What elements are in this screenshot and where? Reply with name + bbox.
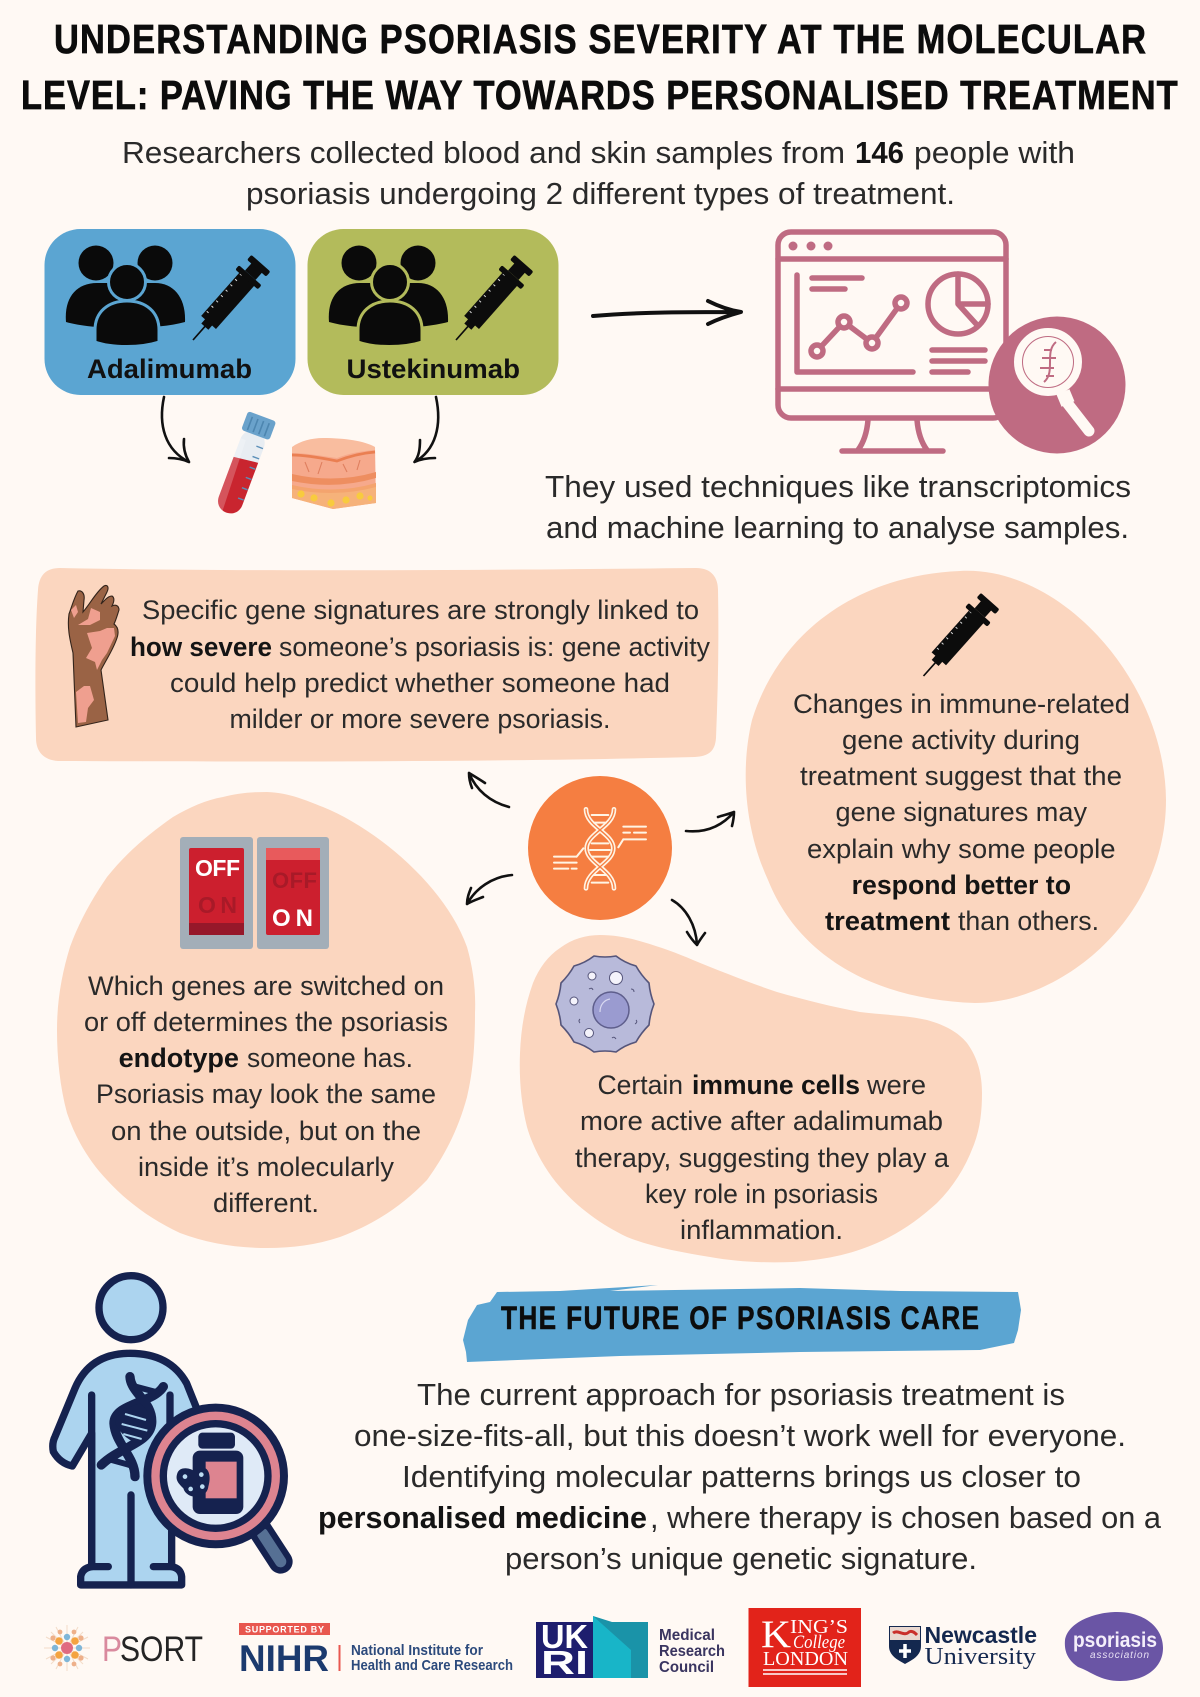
- logo: UKRI Medical Research Council: Research: [659, 1643, 725, 1660]
- severity text: [130, 595, 710, 734]
- arrow: to severity panel: [469, 773, 509, 807]
- future care text: person’s unique genetic signature.: [505, 1541, 977, 1576]
- severity text: milder or more severe psoriasis.: [230, 704, 610, 734]
- logo: Newcastle University: [889, 1622, 1037, 1670]
- logo: King's College London: College: [793, 1632, 845, 1653]
- logo: UKRI Medical Research Council: Medical: [659, 1627, 715, 1644]
- icon: skin layers: [292, 438, 376, 509]
- methods text: and machine learning to analyse samples.: [546, 510, 1129, 545]
- intro text: psoriasis undergoing 2 different types of treatment.: [246, 176, 955, 211]
- intro text: 146: [855, 135, 904, 170]
- title: [21, 17, 1178, 119]
- arrow: Adalimumab to samples: [162, 397, 189, 462]
- icon: people: [329, 246, 448, 346]
- arrow: samples to analysis: [593, 301, 741, 324]
- immune cells text: therapy, suggesting they play a: [575, 1143, 950, 1173]
- arrow: to endotype panel: [467, 875, 512, 904]
- panel: severity gene signatures: [35, 568, 718, 762]
- intro text: Researchers collected blood and skin samples from: [122, 135, 845, 170]
- arrow: to immune cells panel: [672, 900, 705, 945]
- label: Ustekinumab: Ustekinumab: [346, 354, 520, 384]
- arrow: Ustekinumab to samples: [414, 397, 438, 462]
- immune cells text: Certain: [598, 1070, 683, 1100]
- icon: immune cell: [556, 956, 654, 1052]
- future care text: one-size-fits-all, but this doesn’t work well for everyone.: [354, 1418, 1126, 1453]
- panel: Adalimumab group: [44, 229, 296, 395]
- immune cells text: were: [866, 1070, 926, 1100]
- label: Adalimumab: Adalimumab: [87, 354, 252, 384]
- icon: syringe: [182, 253, 272, 350]
- severity text: could help predict whether someone had: [170, 668, 670, 698]
- endotype text: Which genes are switched on: [88, 971, 444, 1001]
- heading: future of psoriasis care: THE FUTURE OF PSORIASIS CARE: [501, 1302, 979, 1337]
- logo: NIHR: [239, 1623, 513, 1679]
- treatment response text: explain why some people: [807, 834, 1116, 864]
- logo: UKRI Medical Research Council: UK: [541, 1618, 588, 1655]
- treatment response text: respond better to: [852, 870, 1071, 900]
- logo: Newcastle University: Newcastle: [924, 1622, 1037, 1648]
- panel: treatment response: [746, 571, 1166, 1003]
- immune cells text: immune cells: [692, 1070, 860, 1100]
- icon: on off switches: ON: [272, 905, 313, 932]
- logo: PSORT: [44, 1625, 203, 1671]
- logo: UKRI Medical Research Council: Council: [659, 1659, 714, 1676]
- icon: person with DNA and magnifier: [53, 1276, 284, 1585]
- endotype text: Psoriasis may look the same: [96, 1079, 436, 1109]
- treatment response text: treatment: [825, 906, 950, 936]
- icon: monitor with magnifier: [778, 232, 1126, 454]
- logo: UKRI Medical Research Council: [536, 1616, 725, 1681]
- immune cells text: key role in psoriasis: [645, 1179, 878, 1209]
- severity text: someone’s psoriasis is: gene activity: [279, 632, 710, 662]
- endotype text: different.: [213, 1188, 319, 1218]
- future care text: personalised medicine: [318, 1500, 647, 1535]
- immune cells text: [575, 1070, 950, 1245]
- future care text: , where therapy is chosen based on a: [650, 1500, 1162, 1535]
- endotype text: inside it’s molecularly: [138, 1152, 394, 1182]
- logo: King's College London: K: [761, 1613, 791, 1656]
- logo: PSORT: P: [102, 1630, 122, 1669]
- icon: on off switches: OFF: [272, 868, 317, 893]
- logo: PSORT: SORT: [120, 1630, 203, 1669]
- title: UNDERSTANDING PSORIASIS SEVERITY AT THE MOLECULAR: [54, 17, 1146, 63]
- immune cells text: more active after adalimumab: [580, 1106, 943, 1136]
- icon: people: [66, 246, 185, 346]
- treatment response text: treatment suggest that the: [800, 761, 1122, 791]
- logo: Psoriasis Association: [1065, 1612, 1163, 1681]
- immune cells text: inflammation.: [680, 1215, 843, 1245]
- icon: arm with psoriasis patches: [68, 585, 119, 727]
- icon: central DNA circle: [528, 776, 672, 920]
- icon: on off switches: [180, 837, 329, 949]
- severity text: how severe: [130, 632, 272, 662]
- logo: King's College London: [748, 1608, 861, 1687]
- endotype text: endotype: [119, 1043, 239, 1073]
- treatment response text: gene activity during: [842, 725, 1080, 755]
- intro text: people with: [914, 135, 1075, 170]
- icon: syringe: [445, 253, 535, 350]
- intro text: [122, 135, 1075, 211]
- methods text: [545, 469, 1131, 545]
- logo: NIHR: NIHR: [239, 1638, 329, 1679]
- future care text: Identifying molecular patterns brings us closer to: [402, 1459, 1081, 1494]
- logo: NIHR: Health and Care Research: [351, 1657, 513, 1674]
- methods text: They used techniques like transcriptomics: [545, 469, 1131, 504]
- logo: Psoriasis Association: association: [1090, 1650, 1149, 1661]
- panel: immune cells: [520, 935, 982, 1262]
- icon: syringe: [913, 591, 1001, 686]
- logo: UKRI Medical Research Council: RI: [541, 1644, 588, 1681]
- panel: endotype: [57, 792, 475, 1248]
- logo: King's College London: ING’S: [790, 1616, 848, 1638]
- icon: on off switches: ON: [198, 892, 237, 918]
- logo: King's College London: LONDON: [763, 1648, 848, 1670]
- panel: Ustekinumab group: [308, 229, 558, 395]
- severity text: Specific gene signatures are strongly linked to: [142, 595, 699, 625]
- endotype text: someone has.: [247, 1043, 413, 1073]
- future care text: The current approach for psoriasis treatment is: [417, 1377, 1065, 1412]
- logo: Psoriasis Association: psoriasis: [1073, 1629, 1157, 1652]
- treatment response text: gene signatures may: [836, 797, 1087, 827]
- icon: blood tube: [212, 411, 276, 519]
- endotype text: or off determines the psoriasis: [84, 1007, 448, 1037]
- endotype text: [84, 971, 448, 1218]
- heading: future of psoriasis care: [463, 1285, 1021, 1362]
- logo: Newcastle University: University: [924, 1644, 1036, 1670]
- endotype text: on the outside, but on the: [111, 1116, 421, 1146]
- arrow: to treatment response panel: [686, 812, 734, 831]
- title: LEVEL: PAVING THE WAY TOWARDS PERSONALISED TREATMENT: [21, 73, 1178, 119]
- future care text: [318, 1377, 1162, 1576]
- treatment response text: Changes in immune-related: [793, 689, 1130, 719]
- treatment response text: than others.: [958, 906, 1099, 936]
- logo: NIHR: SUPPORTED BY: [245, 1624, 324, 1634]
- treatment response text: [793, 689, 1130, 936]
- icon: on off switches: OFF: [195, 855, 240, 881]
- logo: NIHR: National Institute for: [351, 1642, 483, 1659]
